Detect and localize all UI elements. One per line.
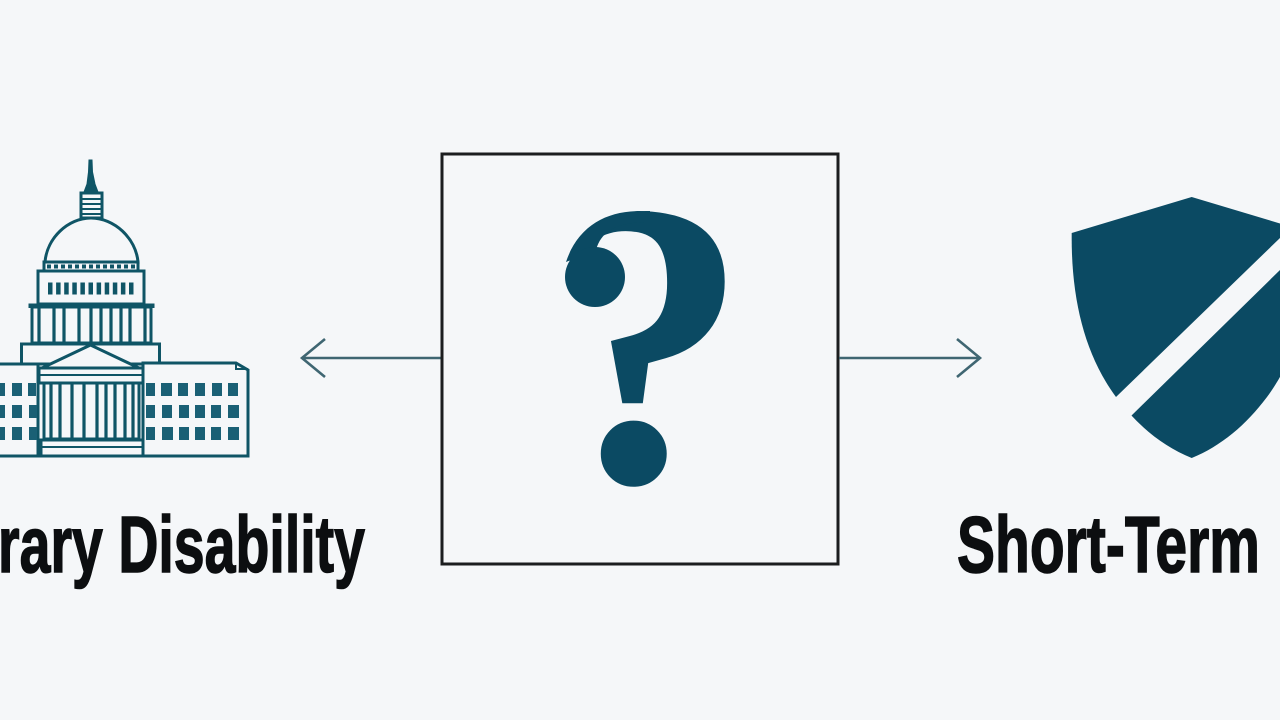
label: left: rary Disability (0, 500, 365, 589)
icon: capitol building (0, 160, 248, 456)
icon: shield (1072, 197, 1280, 458)
center box with question mark (442, 118, 838, 570)
arrow: left (302, 339, 441, 377)
icon: question mark: ? (545, 118, 749, 570)
arrow: right (839, 339, 980, 377)
